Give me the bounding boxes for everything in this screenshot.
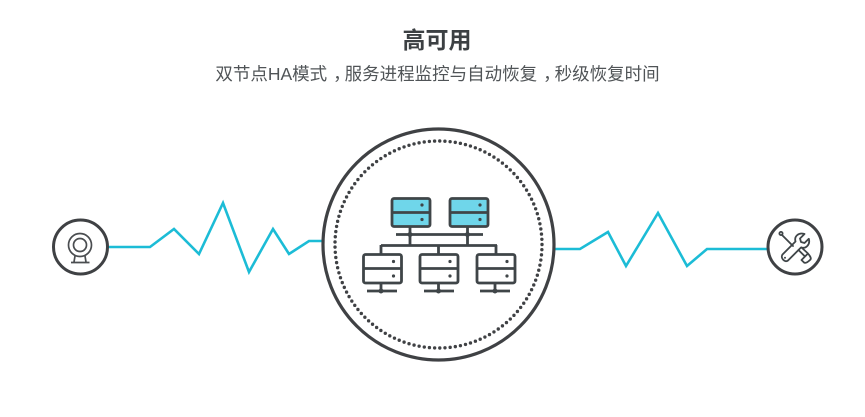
standby server 2: [420, 254, 458, 294]
right pulse line: [555, 213, 767, 266]
title: 高可用: [402, 27, 472, 53]
icon: wrench and screwdriver: [768, 220, 822, 274]
screwdriver: [782, 235, 811, 263]
subtitle: 双节点HA模式 ，服务进程监控与自动恢复 ，秒级恢复时间: [215, 64, 660, 84]
central circle: [323, 129, 554, 360]
standby server 3: [477, 254, 515, 294]
icon: server network: [364, 198, 515, 294]
active server 2: [450, 198, 488, 226]
icon: webcam: [54, 220, 108, 274]
standby server 1: [364, 254, 402, 294]
network connectors: [381, 227, 497, 254]
wrench: [782, 234, 809, 261]
left pulse line: [108, 203, 322, 272]
active server 1: [392, 198, 430, 226]
